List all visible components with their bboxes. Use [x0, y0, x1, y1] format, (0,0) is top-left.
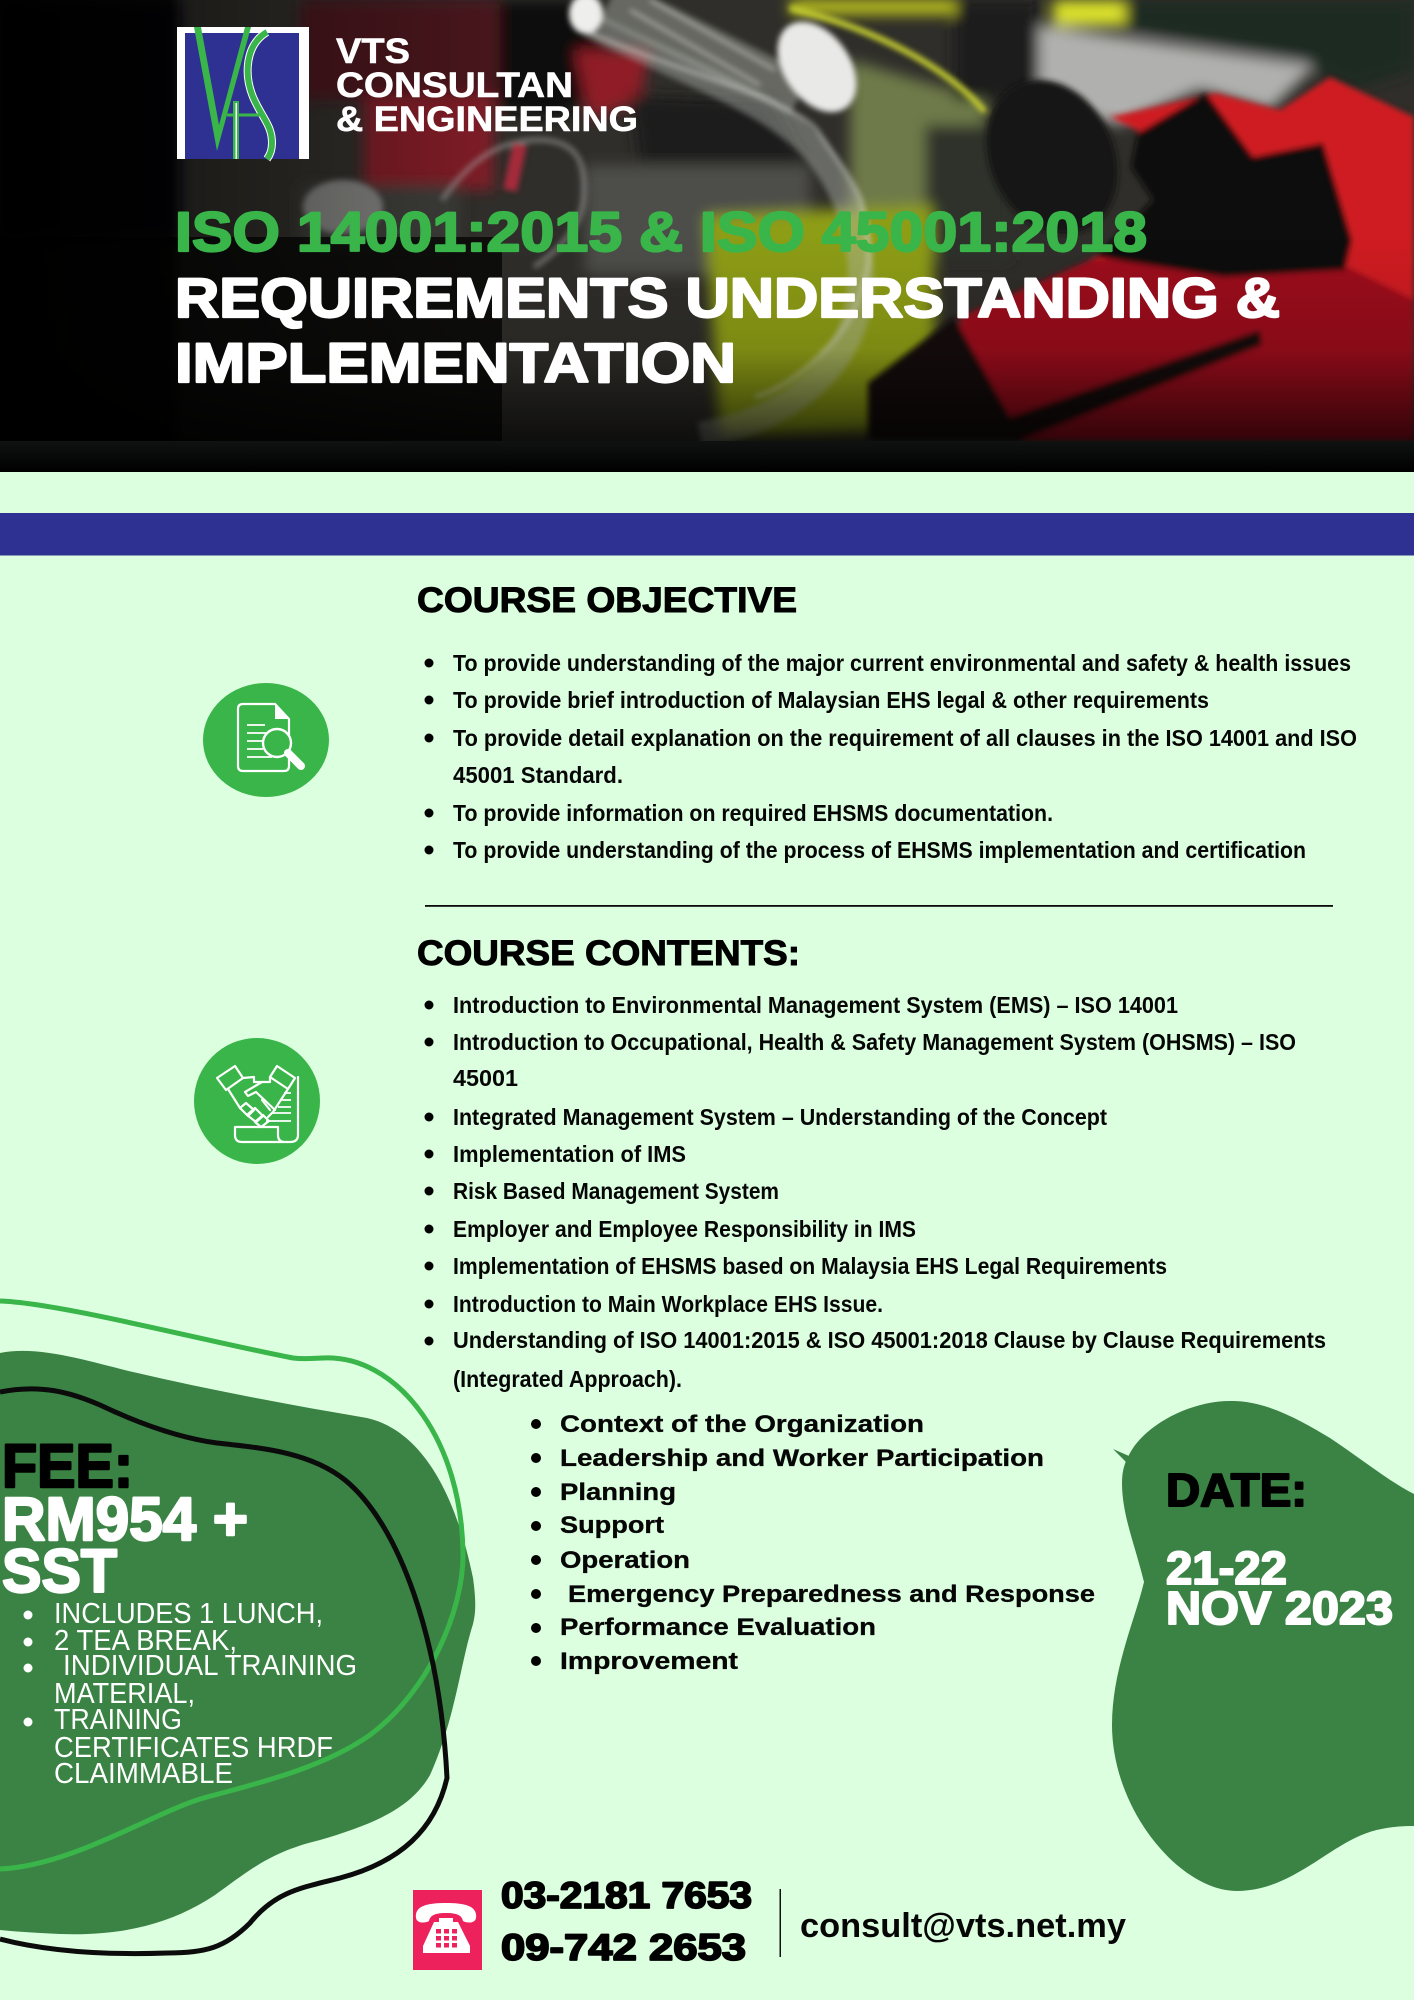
- clause sub-list: Improvement: [560, 1648, 738, 1675]
- course objective list: To provide brief introduction of Malaysian EHS legal & other requirements: [453, 687, 1209, 713]
- date text: 21-22: [1166, 1542, 1287, 1594]
- title: [175, 200, 1280, 394]
- clause sub-list: Planning: [560, 1479, 676, 1506]
- fee inclusions list: MATERIAL,: [54, 1678, 195, 1710]
- logo wordmark: CONSULTAN: [336, 66, 573, 105]
- course objective list: [424, 650, 1357, 863]
- logo: VTS mark: [177, 27, 309, 159]
- course contents list: Introduction to Environmental Management System (EMS) – ISO 14001: [453, 992, 1178, 1018]
- course contents list: Employer and Employee Responsibility in IMS: [453, 1216, 916, 1242]
- course contents list: Implementation of EHSMS based on Malaysia EHS Legal Requirements: [453, 1253, 1167, 1279]
- fee inclusions list: CERTIFICATES HRDF: [54, 1732, 333, 1764]
- phone numbers: [501, 1875, 752, 1968]
- blue band: [0, 513, 1414, 556]
- clause sub-list: Context of the Organization: [560, 1411, 924, 1438]
- phone numbers: 03-2181 7653: [501, 1875, 752, 1916]
- email: consult@vts.net.my: [800, 1907, 1126, 1945]
- course contents list: Implementation of IMS: [453, 1141, 686, 1167]
- heading: course contents: COURSE CONTENTS:: [417, 934, 800, 973]
- heading: course objective: COURSE OBJECTIVE: [417, 581, 797, 620]
- date text: NOV 2023: [1166, 1582, 1393, 1634]
- icon: handshake over contract: [194, 1038, 320, 1164]
- fee amount: SST: [2, 1537, 117, 1605]
- panel: date: [1112, 1401, 1414, 1891]
- course contents list: Understanding of ISO 14001:2015 & ISO 45001:2018 Clause by Clause Requirements: [453, 1327, 1326, 1353]
- fee amount: RM954 +: [2, 1485, 248, 1553]
- title: ISO 14001:2015 & ISO 45001:2018: [175, 200, 1147, 263]
- fee blob black outline: [0, 1389, 447, 1954]
- icon: document with magnifier: [203, 683, 329, 797]
- icon: telephone: [413, 1890, 482, 1970]
- fee blob green outline: [0, 1301, 463, 1869]
- course contents list: [424, 992, 1326, 1392]
- fee inclusions list: TRAINING: [54, 1704, 182, 1736]
- title: REQUIREMENTS UNDERSTANDING &: [175, 266, 1280, 329]
- course contents list: 45001: [453, 1065, 518, 1091]
- header lower dark strip: [0, 441, 1414, 472]
- clause sub-list: [531, 1411, 1095, 1675]
- course contents list: Integrated Management System – Understanding of the Concept: [453, 1104, 1107, 1130]
- header photo: safety goggles and red glove: [0, 0, 1414, 441]
- logo wordmark: VTS: [336, 32, 410, 71]
- course objective list: To provide detail explanation on the requirement of all clauses in the ISO 14001 and ISO: [453, 725, 1357, 751]
- fee inclusions list: INDIVIDUAL TRAINING: [63, 1650, 357, 1682]
- title: IMPLEMENTATION: [175, 331, 736, 394]
- panel: fee: [0, 1301, 475, 1954]
- course objective list: To provide information on required EHSMS documentation.: [453, 800, 1053, 826]
- date text: DATE:: [1166, 1464, 1307, 1516]
- clause sub-list: Performance Evaluation: [560, 1614, 876, 1641]
- fee inclusions list: 2 TEA BREAK,: [54, 1625, 237, 1657]
- clause sub-list: Emergency Preparedness and Response: [568, 1581, 1095, 1608]
- clause sub-list: Operation: [560, 1547, 690, 1574]
- clause sub-list: Leadership and Worker Participation: [560, 1445, 1044, 1472]
- logo wordmark: [336, 32, 638, 139]
- course contents list: Introduction to Occupational, Health & Safety Management System (OHSMS) – ISO: [453, 1029, 1296, 1055]
- date text: [1166, 1464, 1393, 1634]
- fee amount: [2, 1432, 248, 1605]
- course contents list: (Integrated Approach).: [453, 1366, 682, 1392]
- fee inclusions list: INCLUDES 1 LUNCH,: [54, 1598, 323, 1630]
- fee inclusions list: [24, 1598, 357, 1790]
- phone numbers: 09-742 2653: [501, 1927, 746, 1968]
- fee amount: FEE:: [2, 1432, 133, 1500]
- course objective list: To provide understanding of the process of EHSMS implementation and certification: [453, 837, 1306, 863]
- course contents list: Introduction to Main Workplace EHS Issue.: [453, 1291, 883, 1317]
- logo wordmark: & ENGINEERING: [336, 100, 638, 139]
- course objective list: 45001 Standard.: [453, 762, 623, 788]
- course contents list: Risk Based Management System: [453, 1178, 779, 1204]
- course objective list: To provide understanding of the major current environmental and safety & health issues: [453, 650, 1351, 676]
- clause sub-list: Support: [560, 1512, 664, 1539]
- fee inclusions list: CLAIMMABLE: [54, 1758, 233, 1790]
